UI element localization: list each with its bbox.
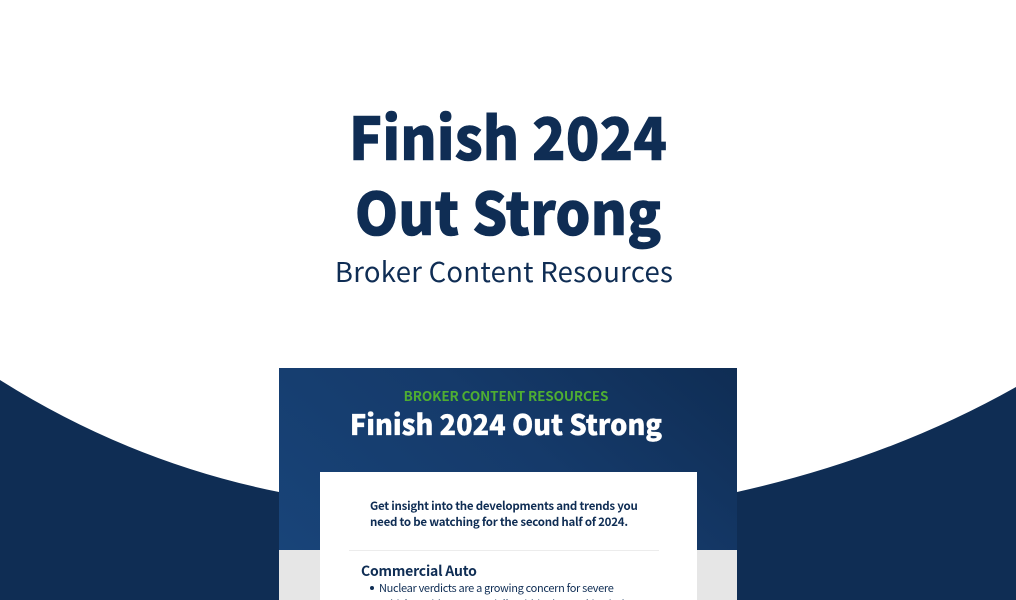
intro text [370,498,638,530]
panel: document preview [279,368,737,600]
main title: Out Strong [355,167,661,252]
subtitle: Broker Content Resources [335,250,673,290]
main title [349,92,667,252]
bullet list [370,580,649,600]
bullet text [379,580,649,600]
intro text: need to be watching for the second half of 2024. [370,514,628,530]
content card [320,472,697,600]
document header band [279,368,737,550]
bullet text: Nuclear verdicts are a growing concern for severe [379,580,613,596]
bullet dot [370,586,374,590]
document title: Finish 2024 Out Strong [350,404,662,444]
document kicker: BROKER CONTENT RESOURCES [404,385,608,405]
main title: Finish 2024 [349,92,667,177]
intro text: Get insight into the developments and trends you [370,498,638,514]
divider [349,550,659,551]
section heading: Commercial Auto [361,561,477,581]
